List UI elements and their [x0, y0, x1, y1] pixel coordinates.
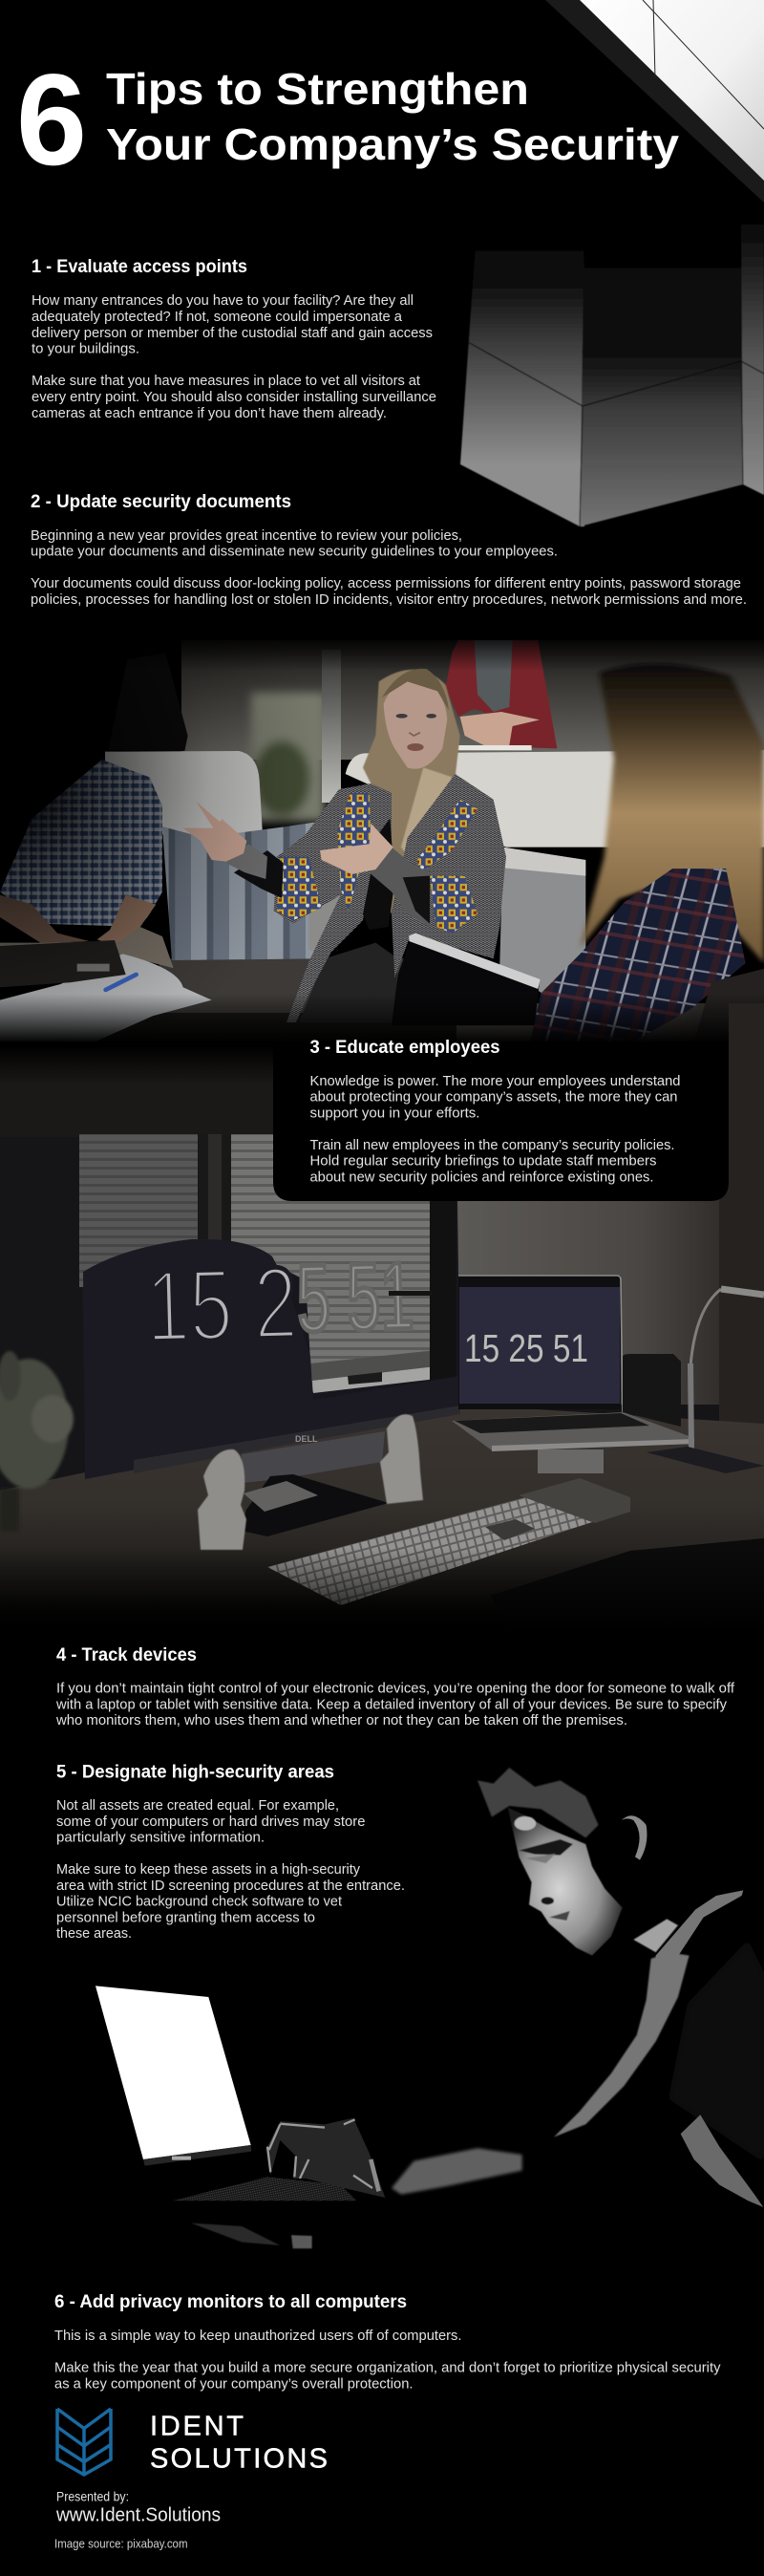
section 6: add privacy monitors	[54, 2291, 721, 2393]
body 1	[32, 293, 436, 421]
title line two: Your Company’s Security	[106, 119, 679, 169]
heading 5: 5 - Designate high-security areas	[56, 1762, 334, 1783]
body 2: update your documents and disseminate new security guidelines to your employees.	[31, 545, 558, 560]
face	[384, 680, 447, 769]
laptop crop coordinates	[96, 1986, 385, 2248]
speaker	[623, 1354, 681, 1427]
laptop	[0, 940, 126, 987]
big numeral: 6	[16, 47, 87, 192]
body 6	[54, 2329, 721, 2393]
body 1: cameras at each entrance if you don’t have them already.	[32, 406, 387, 421]
top band above monitor	[0, 1003, 729, 1137]
keyboard	[172, 2177, 356, 2200]
body 5: some of your computers or hard drives may store	[56, 1814, 365, 1830]
section 4: track devices	[55, 1644, 735, 1728]
monitor bottom bezel	[134, 1406, 460, 1473]
torso faint glow	[668, 1940, 764, 2162]
body 2: Your documents could discuss door-locking policy, access permissions for different entry points, password storage	[31, 576, 741, 591]
right arm	[370, 848, 430, 927]
monitor clock on blinds: 5 51	[296, 1242, 414, 1353]
man, sofa and woman in local crop coordinates	[0, 667, 403, 1041]
section 2: update security documents	[31, 491, 747, 608]
bust left	[198, 1449, 246, 1550]
dark desk shadow	[490, 1538, 764, 1634]
title line one: Tips to Strengthen	[106, 64, 529, 114]
left fade	[0, 1046, 273, 1084]
body 4: with a laptop or tablet with sensitive data. Keep a detailed inventory of all of your devices. Be sure to specify	[55, 1697, 728, 1712]
sofa cushion right	[499, 847, 586, 993]
neck	[633, 1919, 678, 1952]
heading 6: 6 - Add privacy monitors to all computers	[54, 2291, 407, 2312]
tablet	[519, 1478, 630, 1523]
laptop	[452, 1276, 694, 1473]
back wall dark left	[0, 1003, 764, 1634]
panel box	[273, 1046, 729, 1201]
presented by: Presented by:	[56, 2488, 129, 2503]
charging pad	[241, 1474, 389, 1536]
wall right	[456, 1003, 719, 1405]
title	[16, 47, 679, 192]
icon: shield	[57, 2409, 111, 2475]
photo: man at laptop in dark	[96, 1768, 764, 2248]
left sofa back	[105, 751, 263, 834]
desk bottom fade	[0, 1548, 764, 1634]
section 5: designate high-security areas	[56, 1762, 405, 1942]
body 5: Not all assets are created equal. For example,	[56, 1798, 339, 1814]
woman's hair	[363, 670, 460, 914]
drive	[244, 1481, 318, 1512]
heading 2: 2 - Update security documents	[31, 491, 291, 512]
plant	[0, 1351, 74, 1532]
body 3	[309, 1073, 680, 1185]
window with plant	[251, 693, 326, 822]
body 5	[56, 1798, 405, 1942]
body 1: to your buildings.	[32, 342, 139, 357]
right sofa back	[346, 750, 764, 848]
body 3: support you in your efforts.	[309, 1105, 479, 1122]
book	[392, 934, 540, 1025]
heading 4: 4 - Track devices	[56, 1644, 197, 1665]
keyboard	[267, 1497, 592, 1605]
window column	[322, 650, 341, 803]
section 1: evaluate access points	[32, 256, 436, 421]
body 4: who monitors them, who uses them and whether or not they can be taken off the premises.	[55, 1713, 627, 1728]
face	[508, 1808, 623, 1956]
red person	[446, 640, 557, 748]
monitor clock on dark: 15 2	[145, 1247, 299, 1363]
bust right	[380, 1414, 423, 1504]
laptop screen	[96, 1986, 251, 2159]
shirt print	[681, 2114, 763, 2207]
body 3: about protecting your company’s assets, the more they can	[309, 1089, 678, 1105]
body 5: Utilize NCIC background check software to vet	[56, 1894, 342, 1909]
body 2	[31, 528, 747, 608]
wall	[181, 640, 764, 760]
hand	[267, 2118, 385, 2198]
photo: architecture corner top right	[545, 0, 764, 203]
body 2: Beginning a new year provides great incentive to review your policies,	[31, 528, 462, 544]
woman's pants	[304, 942, 397, 1013]
body 3: Knowledge is power. The more your employees understand	[309, 1073, 680, 1089]
body 6: as a key component of your company’s overall protection.	[54, 2377, 413, 2393]
body 6: This is a simple way to keep unauthorized users off of computers.	[54, 2329, 462, 2344]
body 2: policies, processes for handling lost or stolen ID incidents, visitor entry procedures, network permissions and more.	[31, 592, 747, 608]
website: www.Ident.Solutions	[55, 2505, 221, 2526]
dark figure behind	[162, 667, 188, 751]
woman crop coordinates	[183, 640, 764, 1025]
body 3: about new security policies and reinforce existing ones.	[309, 1170, 653, 1185]
hair	[478, 1768, 599, 1837]
chair silhouette	[83, 1239, 460, 1479]
logo: Ident Solutions	[57, 2409, 328, 2475]
photo: desk with monitor and laptop	[0, 1003, 764, 1634]
vignette	[0, 667, 281, 1024]
panel: section 3 educate employees	[273, 1037, 729, 1201]
body 3: Hold regular security briefings to update staff members	[309, 1152, 657, 1170]
man's legs	[0, 927, 174, 968]
pen	[106, 975, 137, 990]
body 1: How many entrances do you have to your facility? Are they all	[32, 293, 414, 309]
body 6: Make this the year that you build a more secure organization, and don’t forget to prioritize physical security	[54, 2360, 721, 2375]
body 5: personnel before granting them access to	[56, 1911, 315, 1926]
man's arms	[0, 895, 89, 943]
forearm glow	[392, 2148, 522, 2195]
table reflection	[191, 2223, 312, 2248]
body 5: these areas.	[56, 1926, 132, 1942]
black top	[363, 819, 394, 930]
man's shirt	[0, 760, 162, 927]
left hand	[183, 801, 246, 862]
monitor	[79, 1134, 460, 1479]
jacket trim	[337, 793, 371, 911]
collar	[656, 1890, 743, 1980]
jacket	[274, 784, 392, 1022]
body 1: Make sure that you have measures in place to vet all visitors at	[32, 374, 420, 389]
image source: Image source: pixabay.com	[54, 2536, 187, 2551]
pillow	[162, 822, 325, 960]
laptop taskbar	[143, 2145, 251, 2166]
man in local crop coordinates	[392, 1768, 764, 2207]
lamp	[647, 1289, 764, 1473]
brand on monitor: DELL	[295, 1434, 318, 1444]
body 3: Train all new employees in the company’s security policies.	[309, 1137, 674, 1153]
logo wordmark	[150, 2412, 328, 2475]
ear	[622, 1815, 647, 1860]
logo wordmark: SOLUTIONS	[150, 2444, 328, 2475]
body 5: Make sure to keep these assets in a high-security	[56, 1862, 361, 1878]
body 1: every entry point. You should also consider installing surveillance	[32, 390, 436, 405]
laptop clock: 15 25 51	[464, 1326, 588, 1370]
seat	[159, 958, 403, 1013]
monitor stand	[242, 1431, 385, 1483]
body 1: delivery person or member of the custodial staff and gain access	[32, 326, 433, 341]
left arm	[234, 850, 284, 898]
photo: building pillar	[460, 213, 764, 526]
desk surface	[0, 1405, 764, 1634]
photo: meeting with three people	[0, 631, 764, 1051]
body 4	[55, 1682, 735, 1728]
sofa centre	[308, 894, 340, 952]
logo wordmark: IDENT	[150, 2412, 244, 2442]
body 4: If you don’t maintain tight control of your electronic devices, you’re opening the door for someone to walk off	[56, 1682, 735, 1697]
heading 1: 1 - Evaluate access points	[32, 256, 247, 277]
right hand	[320, 824, 393, 874]
body 5: particularly sensitive information.	[56, 1831, 265, 1846]
body 5: area with strict ID screening procedures at the entrance.	[56, 1878, 405, 1894]
heading 3: 3 - Educate employees	[309, 1037, 500, 1058]
body 1: adequately protected? If not, someone could impersonate a	[32, 310, 403, 325]
table	[0, 954, 212, 1048]
woman at right	[529, 664, 764, 1050]
arm and shoulder lit edge	[554, 1952, 690, 2137]
